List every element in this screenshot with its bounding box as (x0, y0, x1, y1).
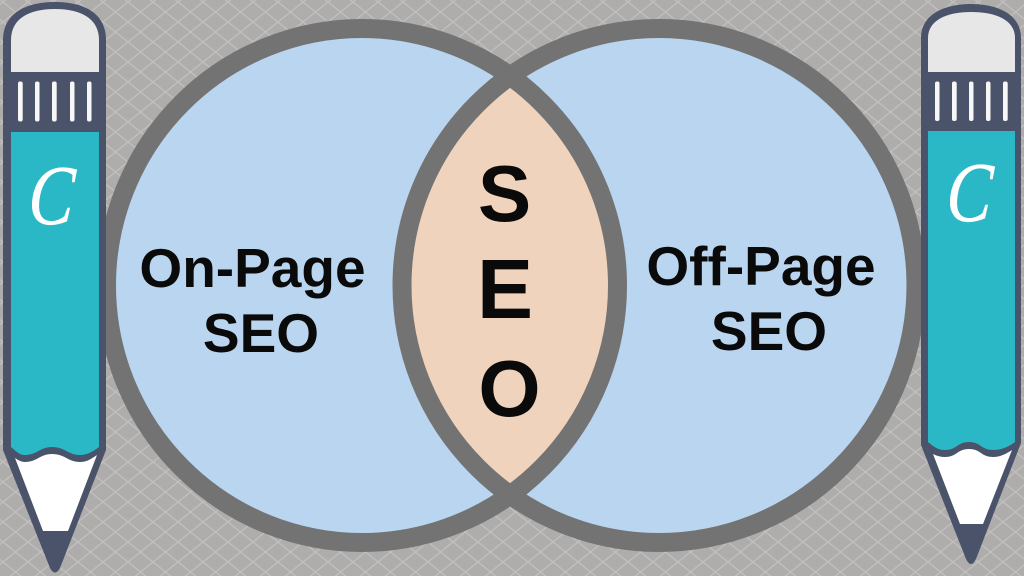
right circle: Off-Page (402, 28, 916, 542)
left pencil (3, 2, 106, 572)
teal barrel (11, 132, 99, 455)
brand letter: C (26, 148, 79, 243)
brand letter: C (944, 145, 997, 240)
ferrule stripes (18, 82, 92, 122)
label: On-Page SEO: SEO (203, 302, 319, 364)
eraser (11, 9, 99, 72)
teal barrel (928, 131, 1015, 450)
pencil body outline (3, 2, 106, 572)
right pencil (921, 4, 1021, 564)
ferrule stripes (935, 82, 1008, 121)
wood tip (933, 449, 1012, 524)
eraser (928, 12, 1015, 72)
label: SEO vertical: E (477, 242, 533, 336)
circle outlines (106, 28, 916, 542)
label: Off-Page SEO: Off-Page (646, 235, 876, 297)
label: On-Page SEO: On-Page (139, 237, 366, 299)
wood tip (15, 454, 97, 531)
venn diagram (106, 28, 916, 542)
pencil body outline (921, 4, 1021, 564)
label: SEO vertical: O (478, 344, 541, 433)
label: SEO vertical: S (478, 149, 531, 238)
left circle: On-Page (106, 28, 618, 542)
label: Off-Page SEO: SEO (711, 300, 827, 362)
overlap lens (404, 77, 617, 494)
